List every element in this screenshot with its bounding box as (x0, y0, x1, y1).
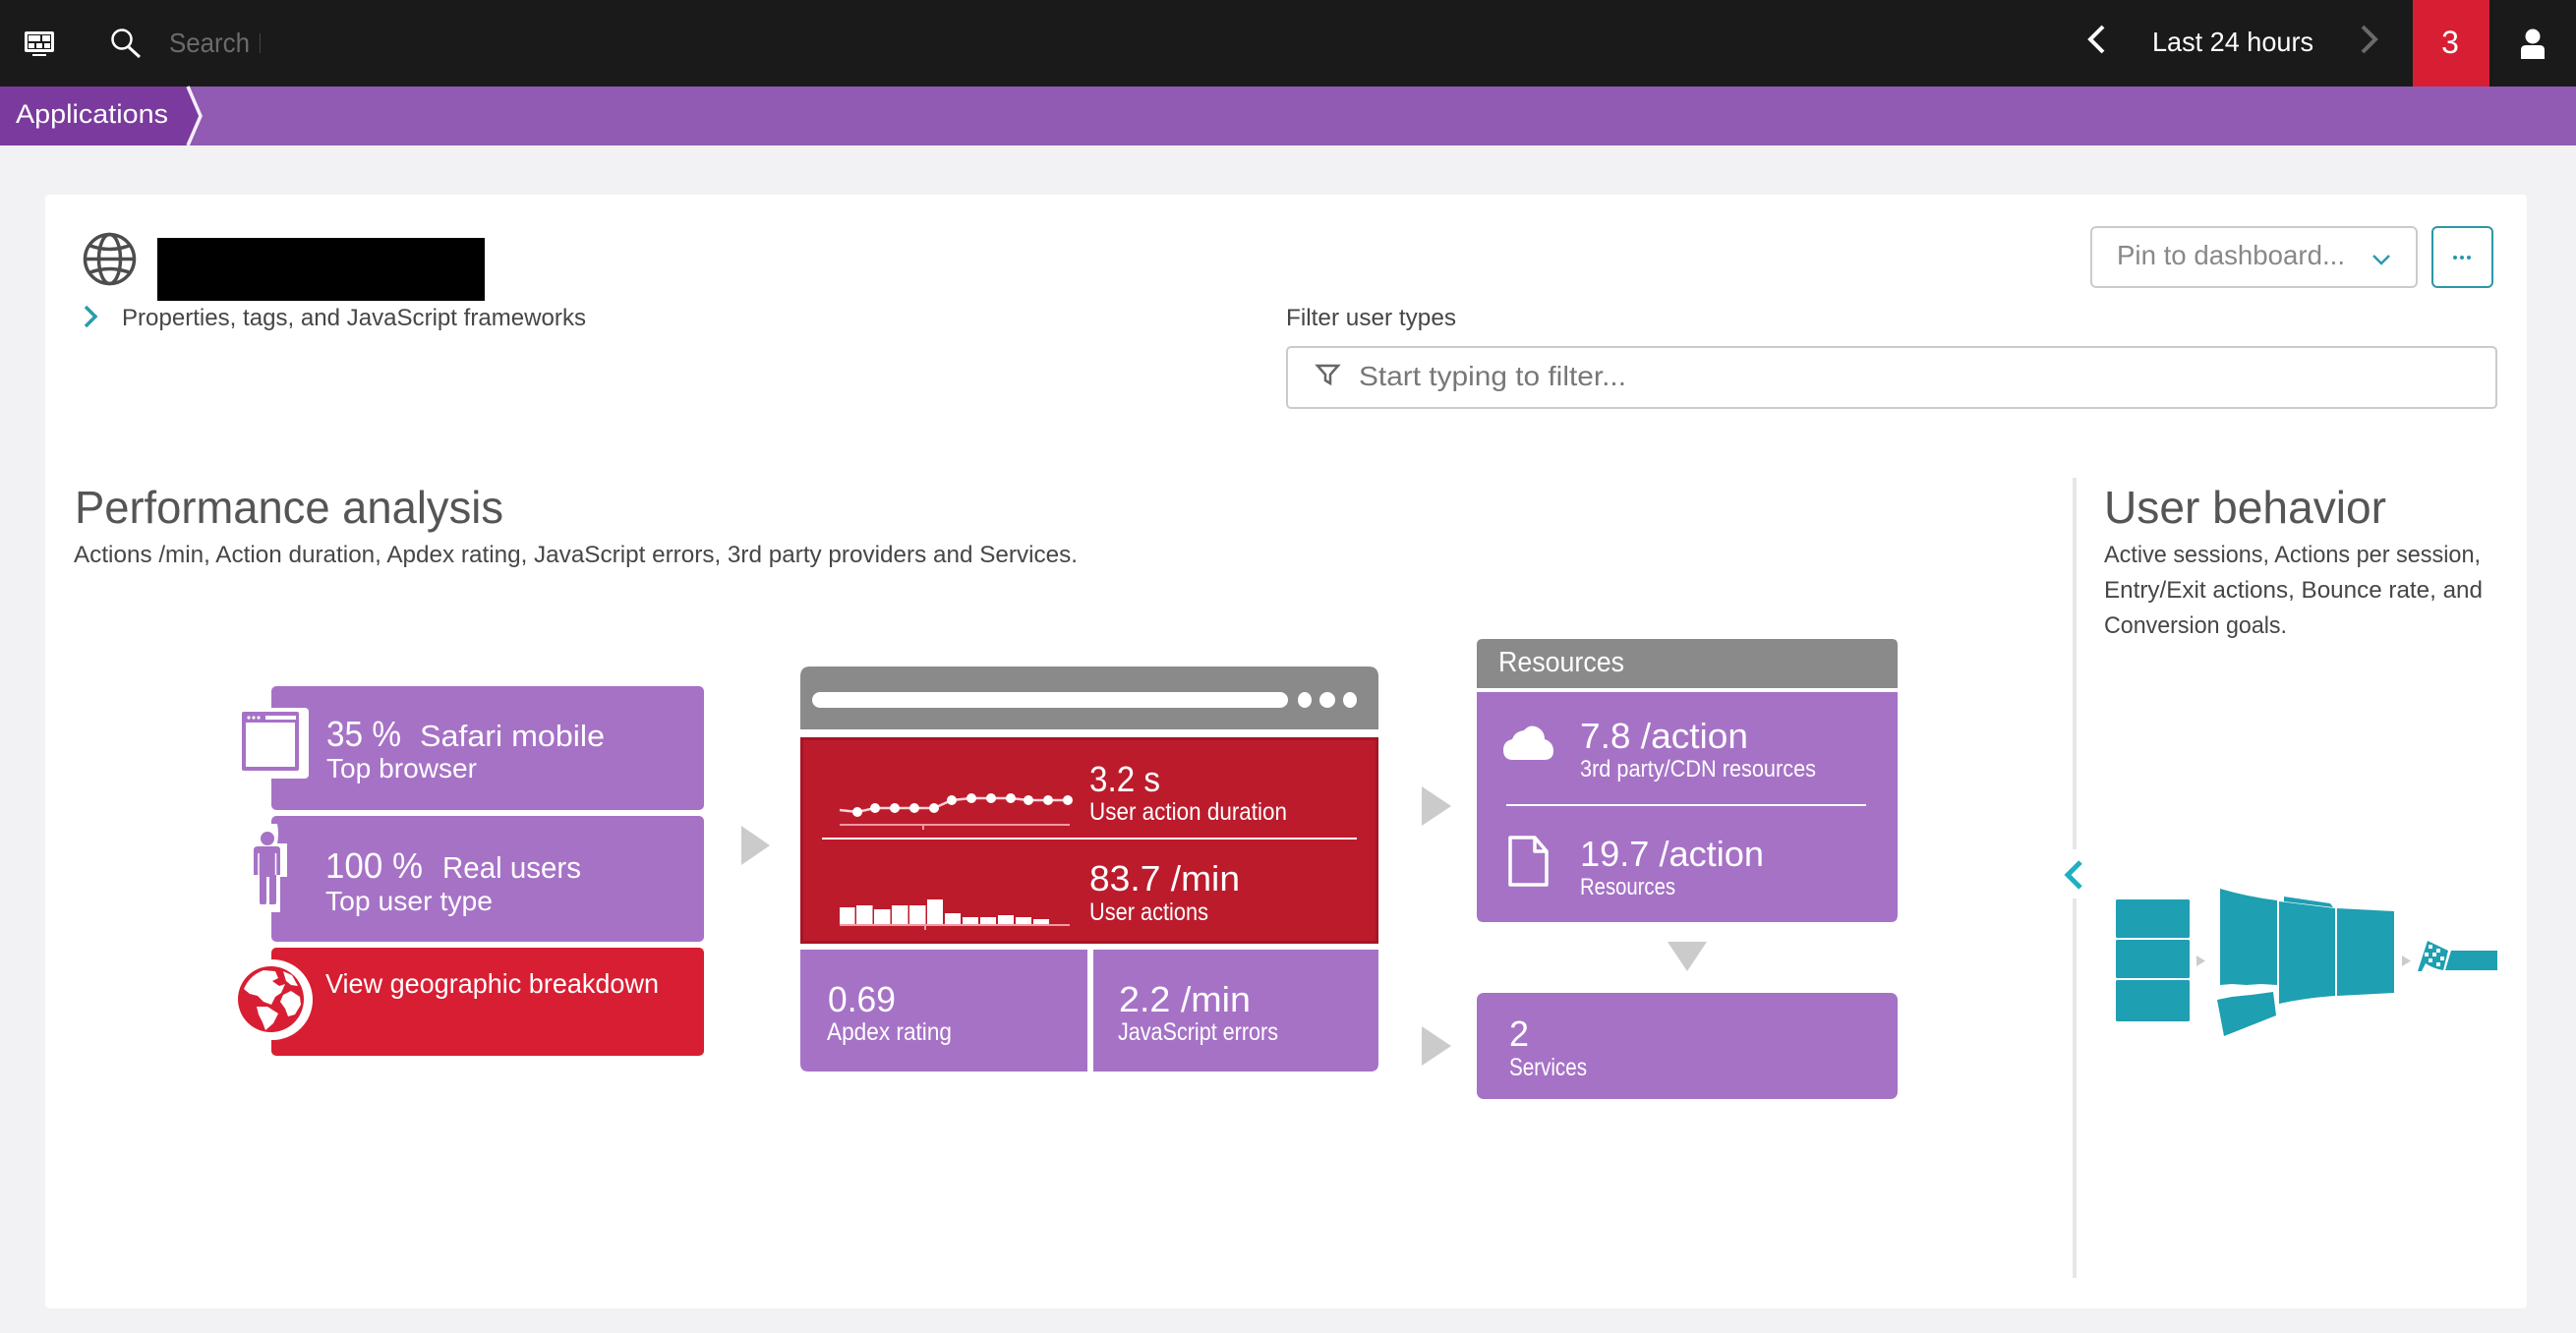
redacted application name (157, 238, 485, 301)
arrow: actions to exit (2402, 956, 2411, 966)
timeframe label: Last 24 hours (2152, 27, 2313, 57)
icon: globe (85, 234, 134, 283)
line chart: user action duration (840, 793, 1073, 830)
action segments (2217, 889, 2394, 1036)
icon: previous timeframe (2090, 27, 2103, 52)
funnel chart: user journey (2116, 889, 2497, 1036)
apdex caption: Apdex rating (827, 1018, 952, 1046)
services value: 2 (1509, 1014, 1529, 1054)
icon: search (112, 29, 140, 57)
problems badge: 3 (2441, 25, 2459, 60)
panel: services (1477, 993, 1898, 1099)
user type share value: 100 % (325, 845, 423, 886)
divider between sections (2073, 478, 2077, 1278)
properties link: Properties, tags, and JavaScript frameworks (122, 305, 586, 331)
apdex value: 0.69 (828, 979, 896, 1019)
breadcrumb label: Applications (16, 99, 168, 129)
filter placeholder: Start typing to filter... (1359, 361, 1626, 391)
resources caption: Resources (1580, 874, 1675, 900)
icon: expand chevron (86, 307, 95, 326)
search field: Search (169, 28, 250, 58)
third-party value: 7.8 /action (1580, 716, 1748, 756)
arrow: to services (1422, 1026, 1451, 1066)
exit segment (2445, 951, 2497, 970)
arrow: entry to actions (2196, 956, 2205, 966)
panel: user action metrics (802, 739, 1376, 942)
top navigation bar (0, 0, 2576, 87)
icon: dashboard monitor (25, 31, 54, 56)
arrow: to resources (1422, 786, 1451, 826)
icon: checkered flag (2418, 941, 2448, 971)
bar chart: user actions (840, 899, 1070, 930)
panel: resources (1477, 692, 1898, 922)
filter input (1287, 347, 2496, 408)
arrow: into browser (741, 826, 770, 865)
problems badge (2413, 0, 2489, 87)
icon: user (2521, 29, 2545, 59)
heading: performance analysis: Performance analysis (75, 482, 503, 533)
icon: cloud (1503, 726, 1553, 760)
browser name: Safari mobile (420, 719, 605, 753)
user type caption: Top user type (325, 886, 493, 916)
services caption: Services (1509, 1054, 1587, 1081)
javascript errors caption: JavaScript errors (1118, 1018, 1278, 1046)
heading: user behavior (2104, 482, 2483, 639)
browser chrome header (800, 666, 1378, 729)
user behavior description (2104, 542, 2483, 639)
arrow: resources to services (1668, 942, 1707, 971)
more actions button (2432, 227, 2492, 287)
resources header (1477, 639, 1898, 688)
user behavior description: Entry/Exit actions, Bounce rate, and (2104, 577, 2483, 604)
duration value: 3.2 s (1089, 759, 1160, 799)
user type name: Real users (442, 850, 581, 885)
user actions value: 83.7 /min (1089, 858, 1240, 898)
panel: geographic breakdown (232, 948, 704, 1056)
icon: person (254, 824, 287, 912)
geographic breakdown link: View geographic breakdown (325, 968, 659, 999)
icon: red world globe (232, 959, 313, 1040)
panel: top user type (254, 816, 704, 942)
breadcrumb bar (0, 87, 2576, 145)
icon: collapse chevron (2068, 862, 2080, 888)
third-party caption: 3rd party/CDN resources (1580, 756, 1816, 782)
heading: performance analysis (74, 482, 1078, 568)
browser share value: 35 % (326, 714, 401, 754)
heading: user behavior: User behavior (2104, 482, 2386, 533)
entry segments (2116, 899, 2190, 1021)
icon: browser window (236, 708, 309, 779)
duration caption: User action duration (1089, 798, 1287, 826)
panel: javascript errors (1093, 950, 1378, 1072)
icon: funnel filter (1317, 366, 1338, 383)
browser caption: Top browser (326, 753, 477, 783)
user actions caption: User actions (1089, 898, 1208, 926)
pin to dashboard dropdown (2091, 227, 2417, 287)
javascript errors value: 2.2 /min (1119, 979, 1251, 1019)
user behavior description: Active sessions, Actions per session, (2104, 542, 2481, 568)
icon: next timeframe (2363, 27, 2375, 52)
application header (85, 234, 586, 331)
filter user types (1286, 305, 2496, 408)
resources header: Resources (1498, 647, 1624, 678)
filter label: Filter user types (1286, 305, 1456, 331)
pin to dashboard dropdown: Pin to dashboard... (2117, 240, 2345, 270)
icon: document (1510, 838, 1547, 885)
panel: apdex rating (800, 950, 1087, 1072)
resources value: 19.7 /action (1580, 834, 1764, 874)
user behavior description: Conversion goals. (2104, 612, 2287, 639)
panel: top browser (236, 686, 704, 810)
performance description: Actions /min, Action duration, Apdex rating, JavaScript errors, 3rd party providers and Services. (74, 542, 1078, 568)
